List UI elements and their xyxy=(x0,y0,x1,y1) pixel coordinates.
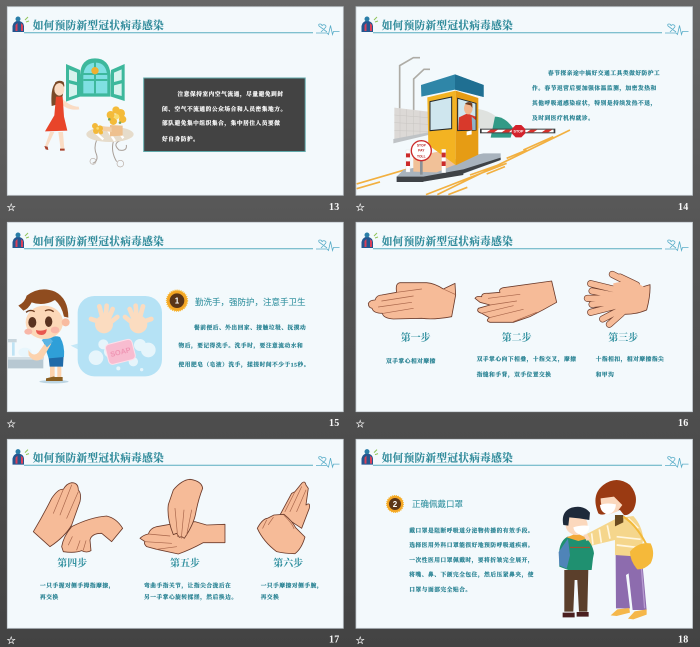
panel: slide 16 xyxy=(356,222,692,430)
slide header: 如何预防新型冠状病毒感染 xyxy=(382,235,513,248)
text box: ventilation advice xyxy=(144,78,305,152)
step labels: 第六步 xyxy=(273,556,303,570)
footer: icon and page number: ☆ xyxy=(6,202,16,214)
illustration: boy washing hands xyxy=(8,289,187,383)
illustration: girl opening window xyxy=(44,58,134,167)
text block: travel protection advice: 春节探亲途中搞好交通工具类做好防护工 xyxy=(548,69,660,77)
text block: mask advice: 口罩与面部完全贴合。 xyxy=(409,586,472,594)
toll sign and posts: TOLL xyxy=(417,154,426,158)
step descriptions: 一只手摩擦对侧手腕， xyxy=(261,582,323,590)
open hands xyxy=(91,306,151,325)
badge: number 1: 1 xyxy=(175,297,180,306)
footer: icon and page number: 14 xyxy=(678,202,689,213)
child xyxy=(559,507,594,617)
footer: icon and page number: ☆ xyxy=(356,202,365,214)
footer: icon and page number: ☆ xyxy=(6,635,16,647)
text block: hand washing advice: 使用肥皂（皂液）洗手，揉搓时间不少于15秒。 xyxy=(178,360,310,370)
speech bubble with soap xyxy=(71,296,162,376)
slide header: 如何预防新型冠状病毒感染 xyxy=(33,235,164,248)
footer: icon and page number: 16 xyxy=(678,418,689,429)
badge: number 2 xyxy=(387,496,403,512)
barrier with stop sign: STOP xyxy=(514,129,524,133)
step descriptions: 一只手握对侧手拇指摩擦， xyxy=(40,582,115,590)
table with flowers xyxy=(86,106,134,167)
panel: slide 18 xyxy=(356,439,692,647)
text block: travel protection advice: 及时到医疗机构就诊。 xyxy=(532,114,594,122)
footer: icon and page number: 15 xyxy=(329,418,340,429)
footer: icon and page number xyxy=(356,634,689,647)
footer: icon and page number xyxy=(6,202,340,214)
text block: mask advice: 将嘴、鼻、下颌完全包住，然后压紧鼻夹，使 xyxy=(409,570,534,580)
illustration: step 6 hands xyxy=(257,482,310,554)
toll sign and posts xyxy=(406,141,446,175)
step labels: 第五步 xyxy=(170,556,200,570)
step descriptions xyxy=(40,582,323,602)
slide header: 如何预防新型冠状病毒感染 xyxy=(33,19,164,32)
step descriptions: 弯曲手指关节，让指尖合拢后在 xyxy=(144,582,231,590)
illustration: mother fitting mask on child xyxy=(559,480,653,619)
slide header xyxy=(12,16,340,34)
text box: ventilation advice: 闭、空气不流通的公众场合和人员密集地方。 xyxy=(162,105,287,113)
slide header: 如何预防新型冠状病毒感染 xyxy=(382,19,513,32)
badge: number 1 xyxy=(167,290,187,311)
step descriptions: 指缝和手背，双手位置交换 xyxy=(477,370,552,380)
sink and water xyxy=(8,339,44,368)
step labels xyxy=(57,556,303,570)
heading: wear a mask correctly: 正确佩戴口罩 xyxy=(412,499,464,509)
step descriptions: 和甲沟 xyxy=(596,370,614,378)
heading: hand hygiene: 勤洗手，强防护，注意手卫生 xyxy=(195,297,306,307)
footer: icon and page number xyxy=(6,634,340,647)
mother xyxy=(587,480,653,619)
boy xyxy=(18,289,70,383)
panel: slide 14 xyxy=(356,7,692,214)
panel: slide 13 xyxy=(6,7,343,214)
barrier with stop sign xyxy=(480,125,555,137)
text block: mask advice xyxy=(409,526,534,594)
foam xyxy=(89,339,156,371)
footer: icon and page number: ☆ xyxy=(6,418,16,430)
speech bubble with soap: SOAP xyxy=(109,345,132,359)
text block: travel protection advice xyxy=(532,69,660,122)
footer: icon and page number: 17 xyxy=(329,634,340,646)
illustration: step 2 hands xyxy=(475,281,557,322)
slide header xyxy=(12,449,340,467)
step descriptions xyxy=(386,355,664,380)
slide header xyxy=(12,232,340,250)
text block: mask advice: 选择医用外科口罩能很好地预防呼吸道疾病。 xyxy=(409,541,534,549)
street lamps xyxy=(400,58,430,110)
step labels xyxy=(401,331,638,344)
text box: ventilation advice: 好自身防护。 xyxy=(162,135,199,143)
panel: slide 15 xyxy=(6,222,343,430)
slide header: 如何预防新型冠状病毒感染 xyxy=(33,452,164,465)
illustration: toll booth xyxy=(357,58,570,195)
step labels: 第三步 xyxy=(608,331,638,344)
panel: slide 17 xyxy=(6,439,343,647)
step descriptions: 另一手掌心旋转揉搓，然后换边。 xyxy=(144,593,238,602)
step labels: 第一步 xyxy=(401,331,431,344)
step descriptions: 双手掌心相对摩擦 xyxy=(386,357,436,365)
step labels: 第二步 xyxy=(502,331,532,344)
illustration: step 4 hands xyxy=(33,483,123,552)
text block: hand washing advice: 物后，要记得洗手。洗手时，要注意流动水和 xyxy=(178,342,303,350)
toll sign and posts: STOP xyxy=(417,144,427,148)
text block: hand washing advice: 餐前便后、外出回家、接触垃圾、抚摸动 xyxy=(194,324,306,332)
slide header xyxy=(362,232,688,250)
illustration: step 3 hands xyxy=(587,274,650,324)
slide header: 如何预防新型冠状病毒感染 xyxy=(382,452,513,465)
girl xyxy=(44,81,79,151)
text block: travel protection advice: 其他呼吸道感染症状，特别是持续发热不退， xyxy=(532,99,657,108)
window xyxy=(66,58,125,102)
slide header xyxy=(362,449,688,467)
toll attendant xyxy=(458,102,476,135)
wall and trees xyxy=(393,108,513,143)
text block: mask advice: 一次性医用口罩佩戴时，要将折皱完全展开， xyxy=(409,556,534,565)
illustration: step 5 hands xyxy=(140,479,225,554)
step descriptions: 再交换 xyxy=(40,593,59,601)
slide header xyxy=(362,16,688,34)
text box: ventilation advice: 注意保持室内空气流通，尽量避免到封 xyxy=(178,90,284,99)
step labels: 第四步 xyxy=(57,556,87,570)
footer: icon and page number xyxy=(6,418,340,430)
text block: hand washing advice xyxy=(178,324,310,370)
road markings xyxy=(357,130,570,195)
toll sign and posts: PAY xyxy=(418,149,425,153)
footer: icon and page number xyxy=(356,418,689,430)
footer: icon and page number: ☆ xyxy=(356,635,365,647)
illustration: step 1 hands xyxy=(368,283,456,319)
palms xyxy=(95,315,147,333)
footer: icon and page number: 13 xyxy=(329,202,340,213)
booth base xyxy=(397,151,501,182)
footer: icon and page number xyxy=(356,202,689,214)
booth body xyxy=(421,74,484,165)
text box: ventilation advice: 部队避免集中组织集合，集中居住人员要做 xyxy=(162,119,281,128)
badge: number 2: 2 xyxy=(393,500,398,509)
footer: icon and page number: 18 xyxy=(678,634,689,646)
text block: travel protection advice: 作。春节返营后要加强体温监测，加密发热和 xyxy=(532,84,657,93)
footer: icon and page number: ☆ xyxy=(356,418,365,430)
step descriptions: 双手掌心向下相叠，十指交叉，摩擦 xyxy=(477,355,577,364)
text block: mask advice: 戴口罩是阻断呼吸道分泌物传播的有效手段。 xyxy=(409,526,534,534)
step descriptions: 十指相扣，相对摩擦指尖 xyxy=(596,355,664,364)
step descriptions: 再交换 xyxy=(261,593,279,601)
